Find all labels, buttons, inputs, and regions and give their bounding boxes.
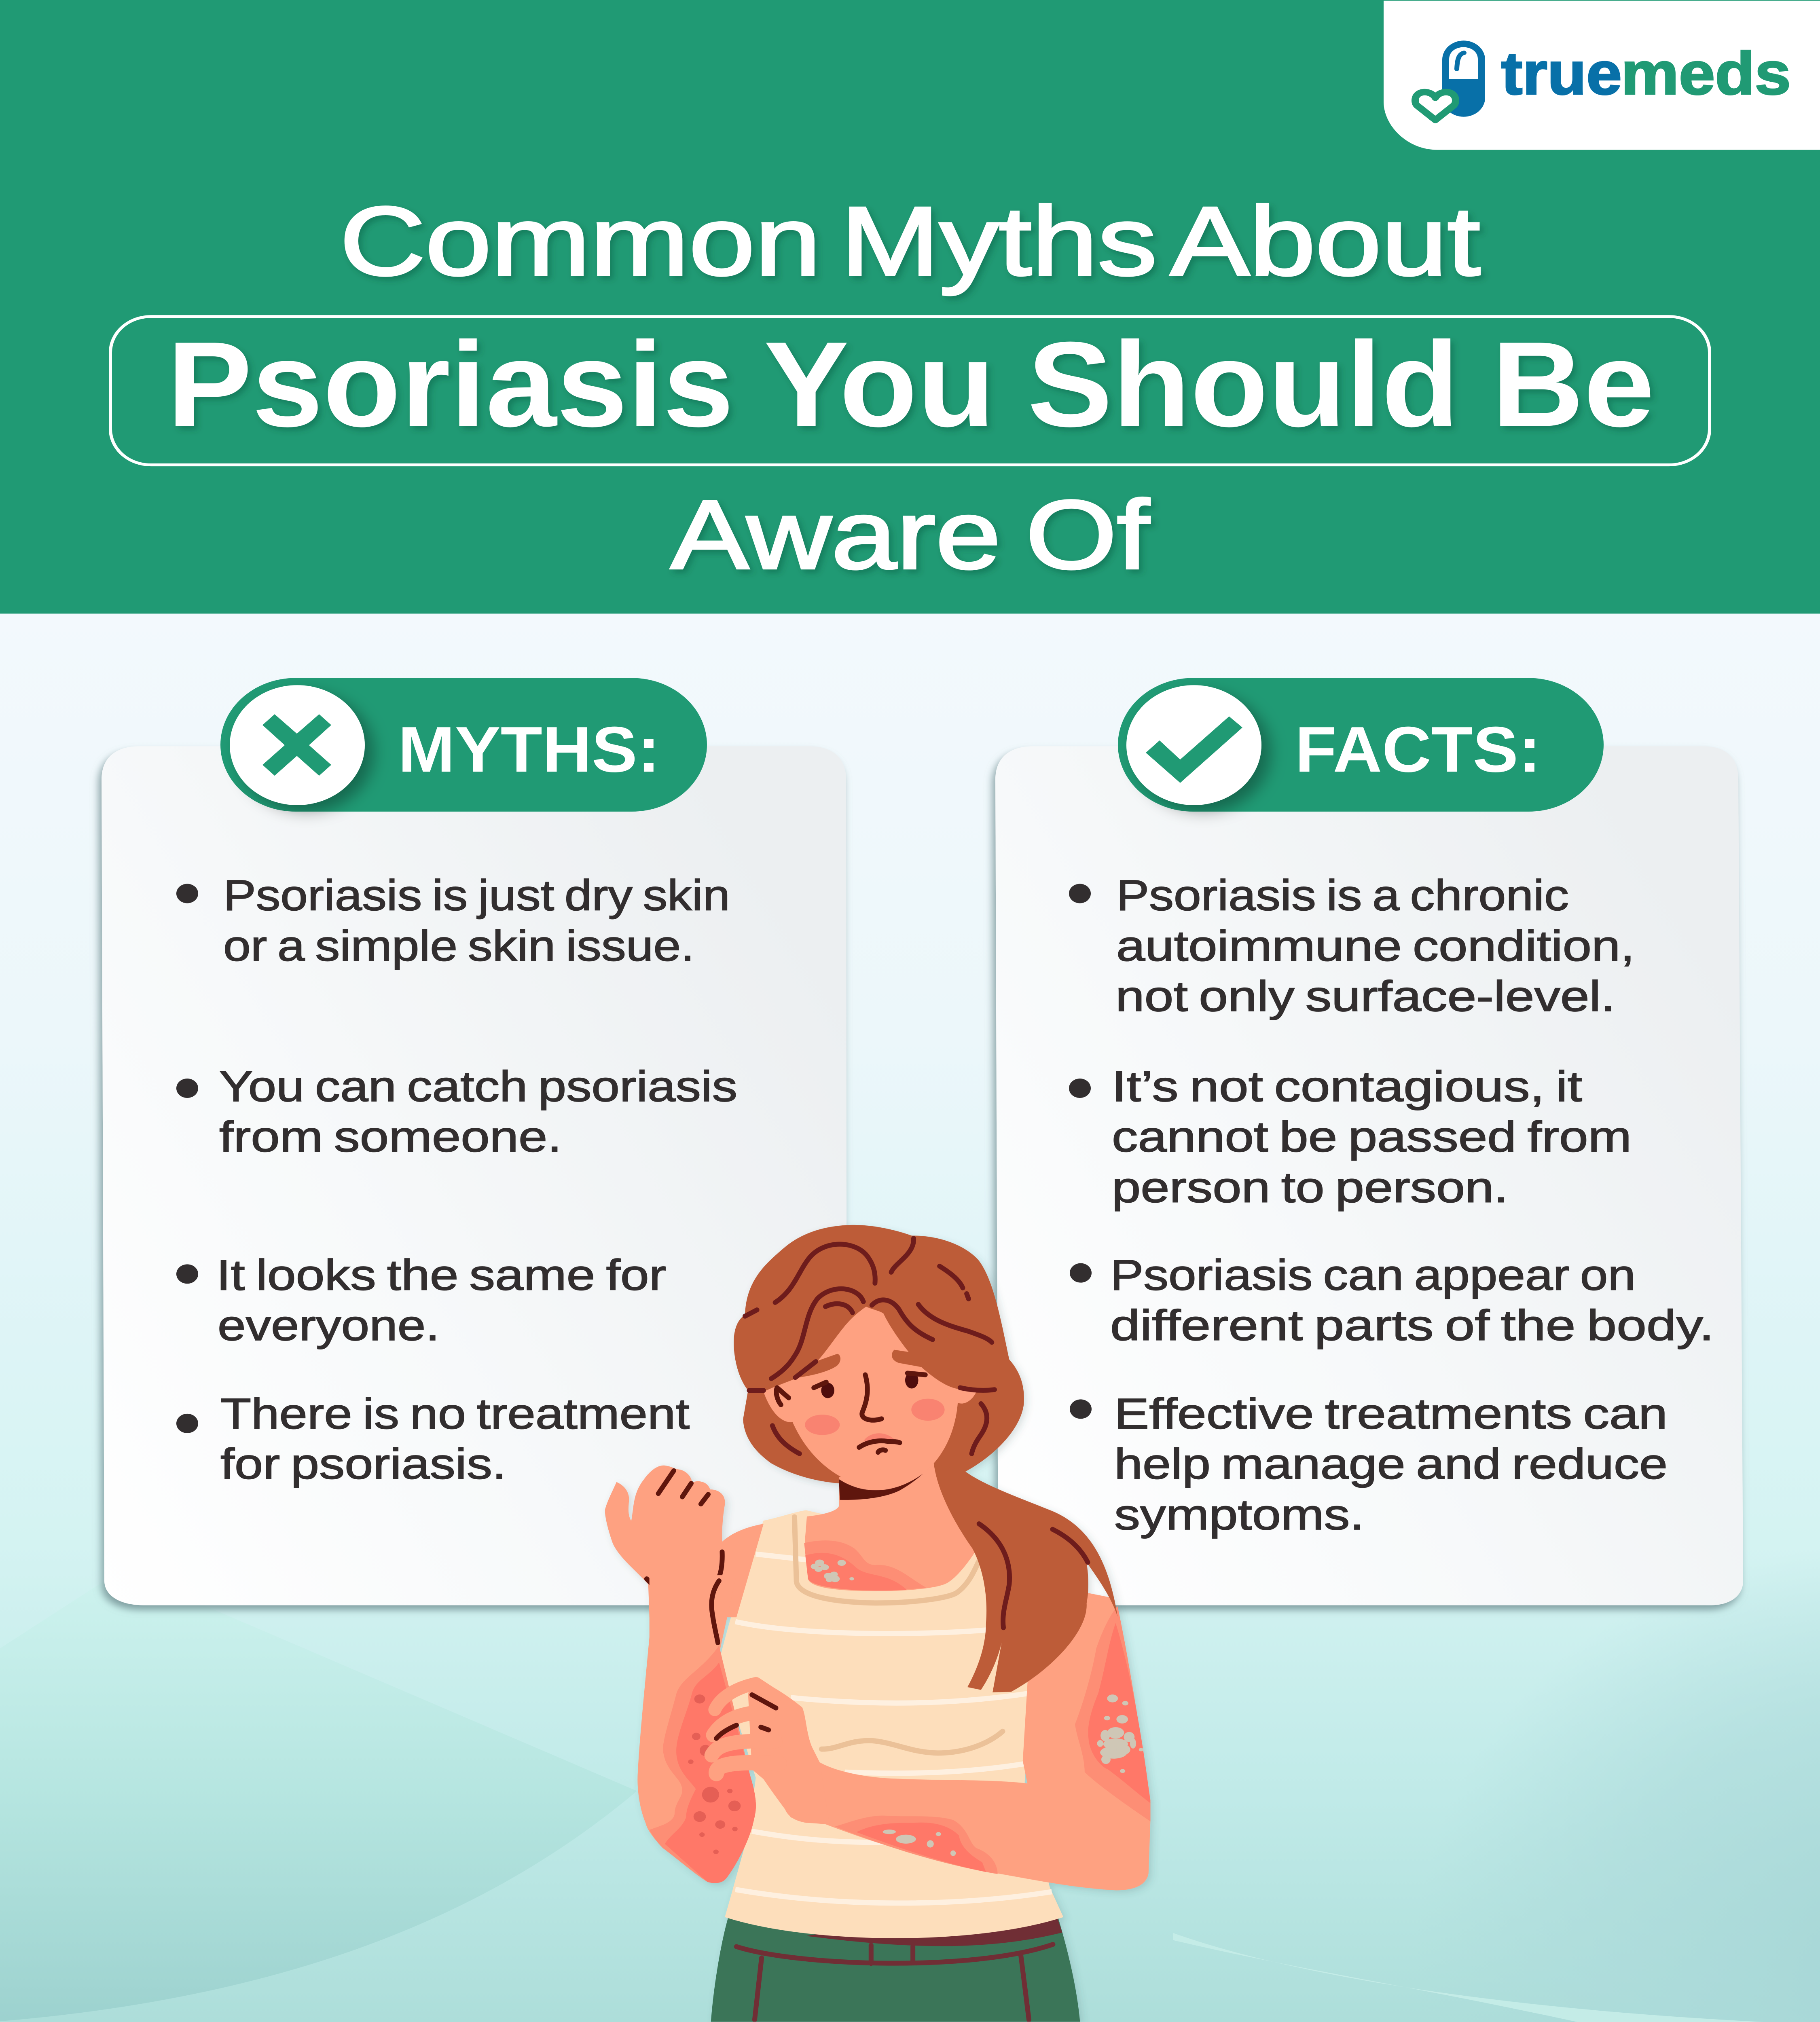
trousers	[711, 1916, 1080, 2022]
hair back	[734, 1225, 1024, 1488]
forearm	[637, 1575, 756, 1883]
background gradient	[0, 613, 1820, 2022]
illustration: woman with psoriasis	[605, 1225, 1150, 2022]
title box	[110, 317, 1710, 465]
myth 4	[176, 1390, 690, 1488]
myth 3: everyone.	[218, 1301, 440, 1349]
fact 3: different parts of the body.	[1110, 1301, 1714, 1349]
icon: check	[1126, 685, 1261, 805]
background soft waves	[0, 1545, 1820, 2022]
fact 3: Psoriasis can appear on	[1110, 1251, 1636, 1299]
myth 3	[176, 1251, 666, 1349]
logo wordmark: true	[1501, 40, 1622, 107]
icon: heart	[1415, 92, 1456, 120]
myths card	[102, 746, 847, 1605]
raised hand	[605, 1466, 764, 1617]
panel: facts	[995, 678, 1743, 1605]
myth 2: You can catch psoriasis	[219, 1062, 737, 1110]
panel: myths	[102, 678, 847, 1605]
fact 2: person to person.	[1112, 1163, 1508, 1212]
fact 4	[1070, 1390, 1668, 1539]
icon: cross	[230, 685, 365, 805]
fact 4: help manage and reduce	[1114, 1440, 1668, 1488]
myth 2	[176, 1062, 737, 1161]
long hair	[934, 1463, 1117, 1692]
title line 2: Psoriasis You Should Be	[167, 316, 1655, 452]
myth 2: from someone.	[219, 1113, 562, 1161]
logo wordmark: meds	[1621, 40, 1791, 107]
logo panel	[1384, 1, 1820, 150]
fact 4: Effective treatments can	[1114, 1390, 1668, 1438]
icon: capsule	[1442, 40, 1485, 117]
fact 4: symptoms.	[1114, 1491, 1364, 1539]
myth 4: There is no treatment	[220, 1390, 690, 1438]
facts badge	[1118, 678, 1604, 812]
title line 1: Common Myths About	[340, 186, 1481, 296]
raised arm with rash	[605, 1466, 764, 1883]
myth 1: Psoriasis is just dry skin	[223, 871, 730, 920]
myth 1: or a simple skin issue.	[223, 922, 694, 970]
facts card	[995, 746, 1743, 1605]
header band	[0, 0, 1820, 613]
myth 3: It looks the same for	[216, 1251, 666, 1299]
fact 2: It’s not contagious, it	[1112, 1062, 1582, 1110]
fact 2	[1069, 1062, 1632, 1212]
tank top	[721, 1510, 1063, 1938]
hair strand lines	[745, 1238, 1088, 1628]
myth 1	[176, 871, 730, 970]
neck and chest with rash	[794, 1463, 978, 1603]
fact 1: autoimmune condition,	[1116, 922, 1635, 970]
fact 2: cannot be passed from	[1112, 1113, 1632, 1161]
crossed arm and scratching hand with rash	[712, 1589, 1150, 1890]
fact 1: Psoriasis is a chronic	[1116, 871, 1569, 920]
title line 3: Aware Of	[671, 480, 1150, 589]
myths badge	[220, 678, 707, 812]
fact 1	[1069, 871, 1635, 1020]
facts heading: FACTS:	[1295, 714, 1541, 786]
face	[764, 1307, 976, 1489]
fact 1: not only surface-level.	[1115, 972, 1615, 1020]
hand palm	[748, 1679, 829, 1824]
myth 4: for psoriasis.	[220, 1440, 506, 1488]
myths heading: MYTHS:	[398, 714, 660, 786]
fact 3	[1070, 1251, 1714, 1349]
